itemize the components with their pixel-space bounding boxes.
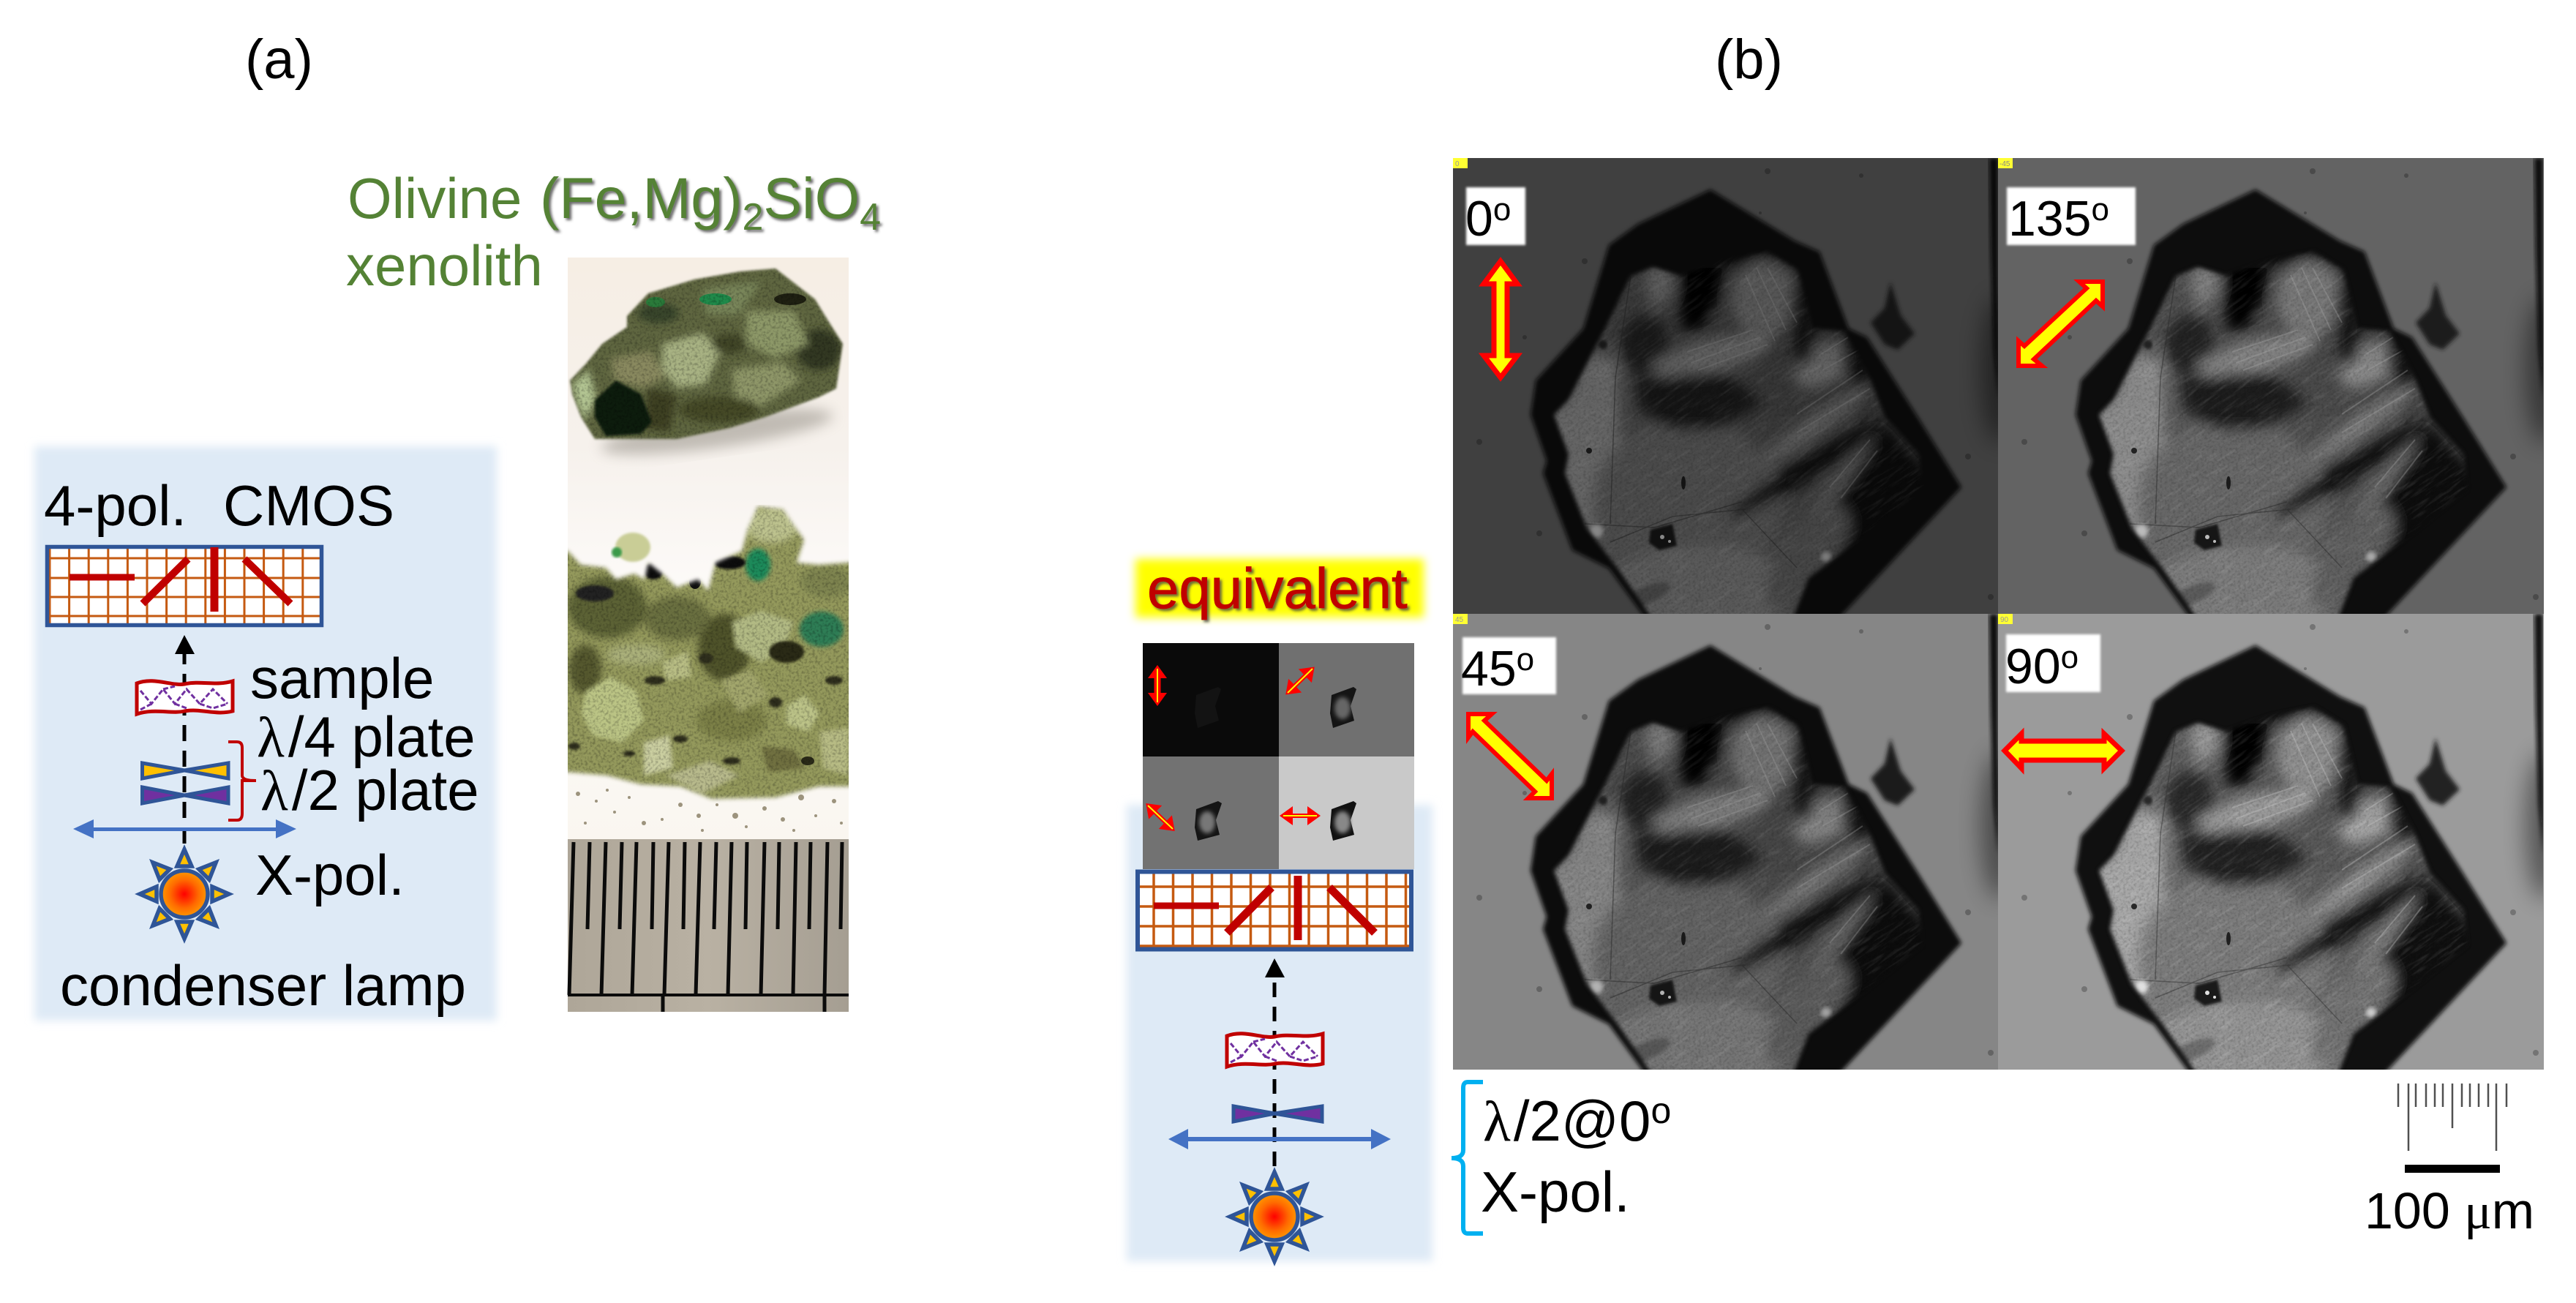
icon: lambda/2 plate bbox=[1233, 1106, 1322, 1122]
title: Olivine xenolith: (Fe,Mg) bbox=[540, 165, 742, 230]
label: 90 degrees: o bbox=[2061, 639, 2079, 675]
label: 45 degrees: o bbox=[1517, 642, 1534, 677]
lower olivine pile bbox=[568, 505, 853, 805]
label: 0 degrees: 0 bbox=[1465, 191, 1493, 247]
label: 135 degrees: 135 bbox=[2008, 191, 2091, 247]
panel: 90 degrees bbox=[1831, 484, 2576, 1303]
label: sample: sample bbox=[250, 646, 434, 710]
tag: 45 bbox=[1453, 614, 1468, 624]
ruler bbox=[568, 839, 849, 1012]
image: equivalent four-polarization frame bbox=[1143, 643, 1414, 869]
label: 90 degrees bbox=[2005, 634, 2100, 694]
tag: 0: 0 bbox=[1455, 160, 1460, 168]
icon: condenser lamp bbox=[140, 849, 229, 939]
arrow: horizontal polarizer bbox=[73, 819, 296, 838]
label: 90 degrees: 90 bbox=[2005, 639, 2061, 694]
heading: panel (a) label: (a) bbox=[245, 29, 313, 91]
title: Olivine xenolith: xenolith bbox=[346, 233, 543, 298]
callout: equivalent: equivalent bbox=[1147, 556, 1408, 620]
label: 135 degrees bbox=[2007, 187, 2136, 247]
panel background bbox=[1127, 805, 1432, 1261]
title: Olivine xenolith: SiO bbox=[763, 165, 860, 230]
panel: (b) light-blue optical setup bbox=[1127, 805, 1432, 1261]
label: 0 degrees: o bbox=[1493, 192, 1511, 228]
title: Olivine xenolith: Olivine bbox=[348, 166, 522, 230]
title: Olivine xenolith: 4 bbox=[860, 196, 881, 239]
label: 45 degrees bbox=[1461, 637, 1556, 696]
arrow: 135 degrees polarization bbox=[2019, 282, 2103, 366]
icon: sample bbox=[137, 681, 233, 714]
label: 45 degrees: 45 bbox=[1461, 641, 1517, 696]
tag: 90 bbox=[1998, 614, 2013, 624]
label: lambda/4 plate: λ/4 plate bbox=[257, 705, 476, 769]
title: Olivine xenolith: 2 bbox=[742, 196, 763, 239]
title: Olivine xenolith bbox=[346, 165, 881, 298]
bar bbox=[2405, 1165, 2500, 1173]
panel: 45 degrees bbox=[1286, 484, 2144, 1303]
upper rock bbox=[568, 263, 849, 446]
tag: -45: -45 bbox=[1999, 160, 2010, 168]
arrow: 90 degrees polarization bbox=[2005, 734, 2122, 768]
label: 135 degrees: o bbox=[2091, 192, 2109, 228]
panel: (a) optical setup bbox=[34, 446, 497, 1021]
label: lambda/2 at 0 degrees: λ/2@0 bbox=[1483, 1089, 1651, 1153]
label: X-pol.: X-pol. bbox=[1481, 1160, 1630, 1224]
photo: xenolith with ruler bbox=[568, 258, 853, 1012]
crystal thumbnails bbox=[1195, 687, 1221, 728]
label: 4-pol. CMOS: CMOS bbox=[223, 473, 394, 538]
arrow: optical axis bbox=[175, 635, 195, 844]
arrow: 0 degrees polarization bbox=[1484, 261, 1517, 378]
label: 0 degrees bbox=[1465, 187, 1525, 247]
loose grains bbox=[615, 533, 650, 562]
tag: 45: 45 bbox=[1455, 616, 1464, 624]
icon: CMOS polarizer sensor grid (b) bbox=[1138, 871, 1411, 950]
arrow: optical axis bbox=[1265, 958, 1285, 1166]
label: X-pol.: X-pol. bbox=[255, 843, 405, 907]
icon: lambda/2 wave plate bbox=[142, 787, 228, 803]
image grid: crystal under four polarizer angles bbox=[1286, 28, 2576, 1303]
scale bar bbox=[2365, 1084, 2534, 1240]
speckled gravel bbox=[576, 789, 843, 832]
icon: sample bbox=[1227, 1034, 1323, 1067]
icon: condenser lamp bbox=[1230, 1172, 1319, 1261]
panel background: light blue bbox=[34, 446, 497, 1021]
tag: 0 bbox=[1453, 158, 1468, 168]
label: lambda/2 plate: λ/2 plate bbox=[260, 758, 479, 822]
shadow beneath upper rock bbox=[598, 399, 835, 464]
label: 100 um: 100 μm bbox=[2365, 1182, 2534, 1240]
panel: 135 degrees bbox=[1831, 28, 2576, 861]
polarization arrows bbox=[1148, 669, 1317, 829]
label: lambda/2 at 0 degrees: o bbox=[1651, 1090, 1671, 1131]
tag: -45 bbox=[1998, 158, 2013, 168]
heading: panel (b) label: (b) bbox=[1715, 29, 1783, 91]
label: 4-pol. CMOS: 4-pol. bbox=[44, 473, 187, 538]
bracket: configuration bbox=[1452, 1082, 1483, 1233]
arrow: 45 degrees polarization bbox=[1468, 714, 1552, 798]
bracket: wave plates bbox=[228, 742, 256, 820]
label: condenser lamp: condenser lamp bbox=[60, 953, 466, 1018]
icon: CMOS polarizer sensor grid bbox=[47, 547, 322, 626]
panel: 0 degrees bbox=[1286, 28, 2144, 861]
arrow: horizontal polarizer bbox=[1168, 1129, 1391, 1149]
tag: 90: 90 bbox=[2000, 616, 2009, 624]
icon: lambda/4 wave plate bbox=[142, 763, 228, 778]
scale ticks bbox=[2398, 1084, 2506, 1151]
